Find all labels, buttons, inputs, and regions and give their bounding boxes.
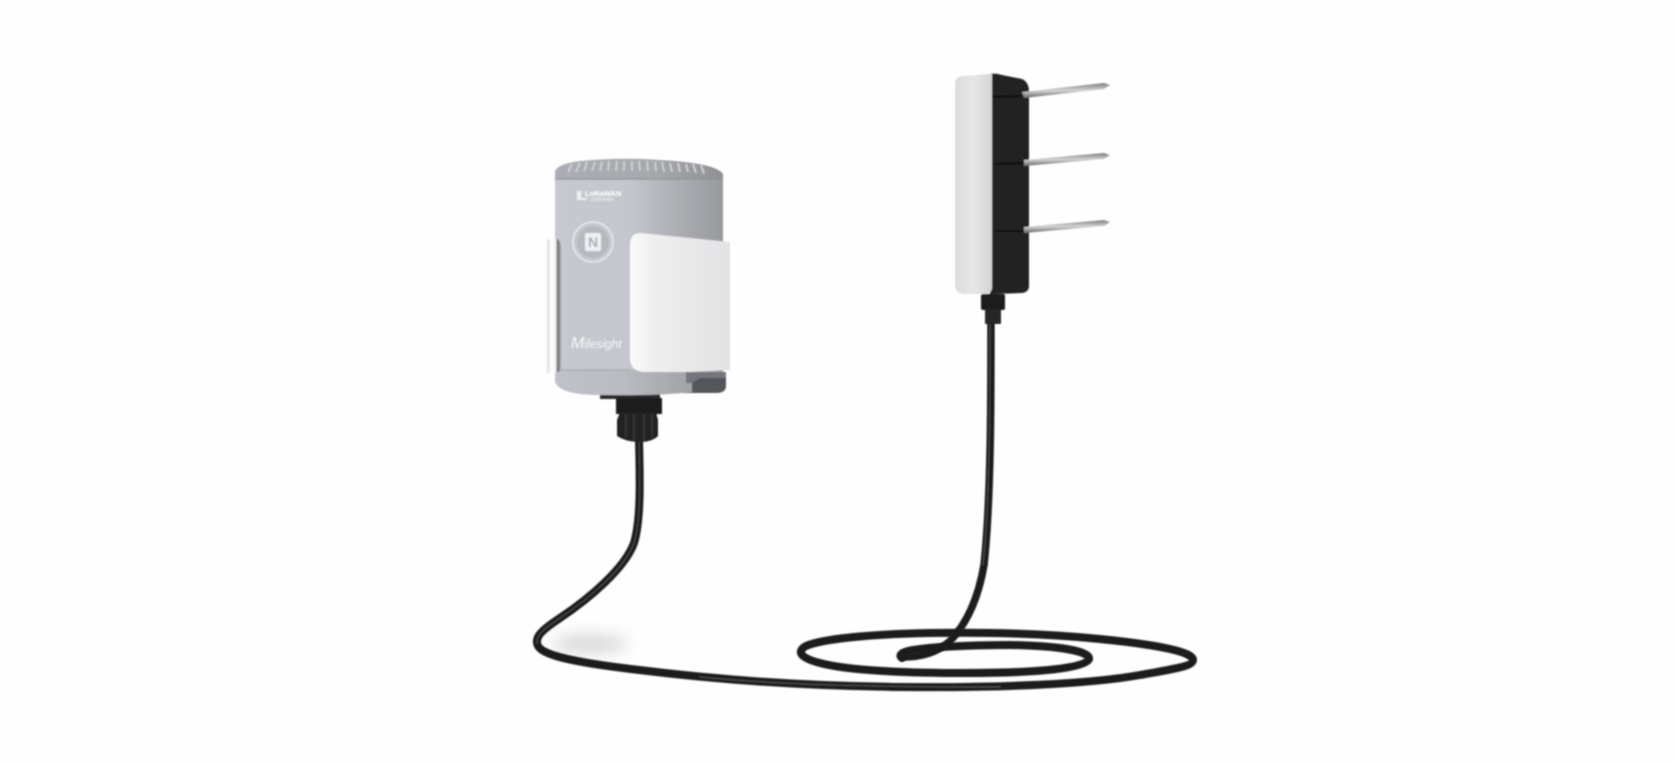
device: LoRaWAN sensor node <box>547 159 730 442</box>
top vent cap <box>555 159 723 180</box>
vent slots <box>568 161 704 174</box>
NFC button <box>572 220 614 264</box>
left mounting clip <box>547 238 561 373</box>
probe connector <box>981 294 1005 324</box>
cable shadow <box>552 635 628 653</box>
NFC button: N <box>588 234 598 250</box>
underside behind the clip <box>680 372 726 393</box>
cable gland <box>600 393 662 442</box>
cable: probe to coil <box>903 320 991 657</box>
LoRaWAN logo <box>577 189 621 202</box>
LoRaWAN logo: CERTIFIED <box>590 197 614 202</box>
main housing <box>555 179 723 372</box>
bottom housing band <box>555 370 692 395</box>
soil probe <box>955 74 1110 324</box>
LoRaWAN logo: LoRaWAN <box>585 189 621 198</box>
Milesight wordmark: Milesight <box>571 335 622 352</box>
probe black body <box>990 74 1029 294</box>
clip underside <box>686 372 726 383</box>
probe seam shadows <box>993 96 1025 231</box>
front mounting clip <box>630 233 730 372</box>
probe white face <box>955 74 992 294</box>
probe pins <box>1022 83 1110 233</box>
cable: device to coil <box>537 440 1193 687</box>
